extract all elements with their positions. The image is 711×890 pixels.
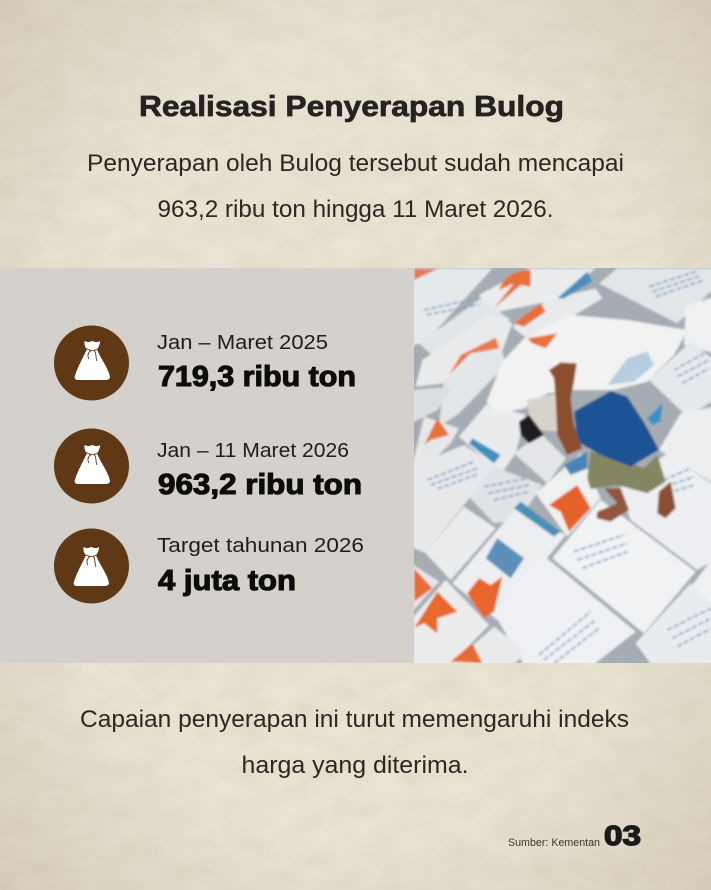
shirt (574, 391, 659, 467)
stat: 2026 realization (54, 428, 362, 504)
title: Realisasi Penyerapan Bulog (139, 91, 564, 123)
closing text (80, 706, 629, 779)
closing text: harga yang diterima. (242, 752, 468, 779)
intro text: 963,2 ribu ton hingga 11 Maret 2026. (158, 196, 554, 223)
page number: 03 (604, 820, 641, 851)
stat: 2025 realization (54, 326, 356, 400)
stat: 2026 target: 4 juta ton (158, 565, 296, 597)
intro text (87, 150, 624, 223)
icon: rice sack target (54, 528, 129, 604)
photo: worker carrying a rice sack (407, 258, 711, 672)
cap and hair (527, 393, 559, 432)
carried sack (487, 315, 687, 413)
sacks, lower area (411, 445, 496, 553)
panel: statistics (0, 268, 414, 663)
stat: 2026 realization: 963,2 ribu ton (158, 469, 362, 501)
closing text: Capaian penyerapan ini turut memengaruhi indeks (80, 706, 629, 733)
icon: rice sack 2025 (54, 326, 129, 400)
legs (597, 488, 629, 522)
stat: 2025 realization: Jan – Maret 2025 (157, 332, 328, 354)
stat: 2025 realization: 719,3 ribu ton (158, 361, 356, 393)
arm (549, 362, 582, 455)
stat: 2026 target (54, 528, 364, 604)
stat: 2026 target: Target tahunan 2026 (157, 535, 364, 557)
sacks, upper area (411, 268, 492, 347)
blue printing (424, 271, 711, 663)
source note: Sumber: Kementan (508, 837, 600, 849)
intro text: Penyerapan oleh Bulog tersebut sudah mencapai (87, 150, 624, 177)
blue logos (557, 272, 592, 298)
shorts (587, 452, 666, 493)
icon: rice sack 2026 (54, 428, 129, 504)
orange logos (494, 270, 531, 308)
stat: 2026 realization: Jan – 11 Maret 2026 (157, 440, 349, 462)
